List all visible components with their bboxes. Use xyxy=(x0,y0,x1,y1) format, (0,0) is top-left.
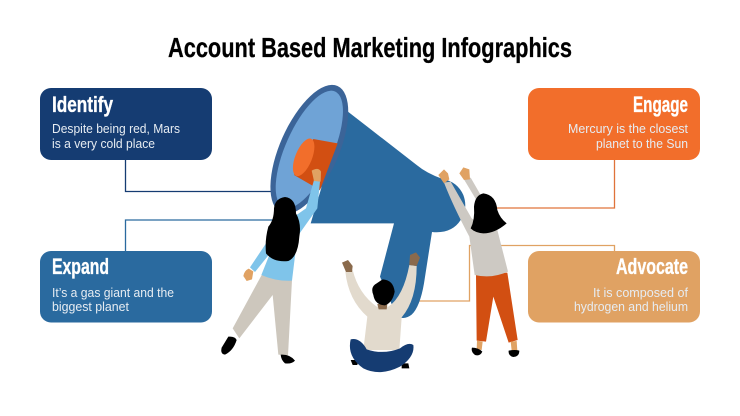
text: engage: planet to the Sun xyxy=(596,137,688,151)
figure: woman left xyxy=(221,169,321,364)
connector: expand xyxy=(126,220,275,251)
title: Account Based Marketing Infographics xyxy=(168,32,572,63)
text: advocate: It is composed of xyxy=(593,286,689,300)
figure: seated man xyxy=(342,252,420,372)
text: identify xyxy=(52,122,180,151)
text: identify: is a very cold place xyxy=(52,137,155,151)
illustration: people with megaphone xyxy=(221,74,519,372)
connector: advocate xyxy=(415,246,614,301)
text: advocate: hydrogen and helium xyxy=(574,300,688,314)
text: advocate xyxy=(574,286,689,314)
text: expand: It’s a gas giant and the xyxy=(52,286,174,300)
connector: engage xyxy=(495,160,614,208)
panel: engage xyxy=(528,88,700,160)
panel: expand xyxy=(40,251,212,322)
figure: woman right xyxy=(438,167,519,357)
heading: identify: Identify xyxy=(52,92,114,117)
heading: advocate: Advocate xyxy=(616,254,688,279)
icon: megaphone xyxy=(254,74,465,318)
heading: expand: Expand xyxy=(52,254,109,279)
text: expand xyxy=(52,286,174,314)
text: identify: Despite being red, Mars xyxy=(52,122,180,136)
panel: identify xyxy=(40,88,212,160)
panel: advocate xyxy=(528,251,700,322)
text: engage: Mercury is the closest xyxy=(568,122,689,136)
heading: engage: Engage xyxy=(633,92,688,117)
text: engage xyxy=(568,122,689,151)
connector: identify xyxy=(126,160,275,192)
text: expand: biggest planet xyxy=(52,300,130,314)
